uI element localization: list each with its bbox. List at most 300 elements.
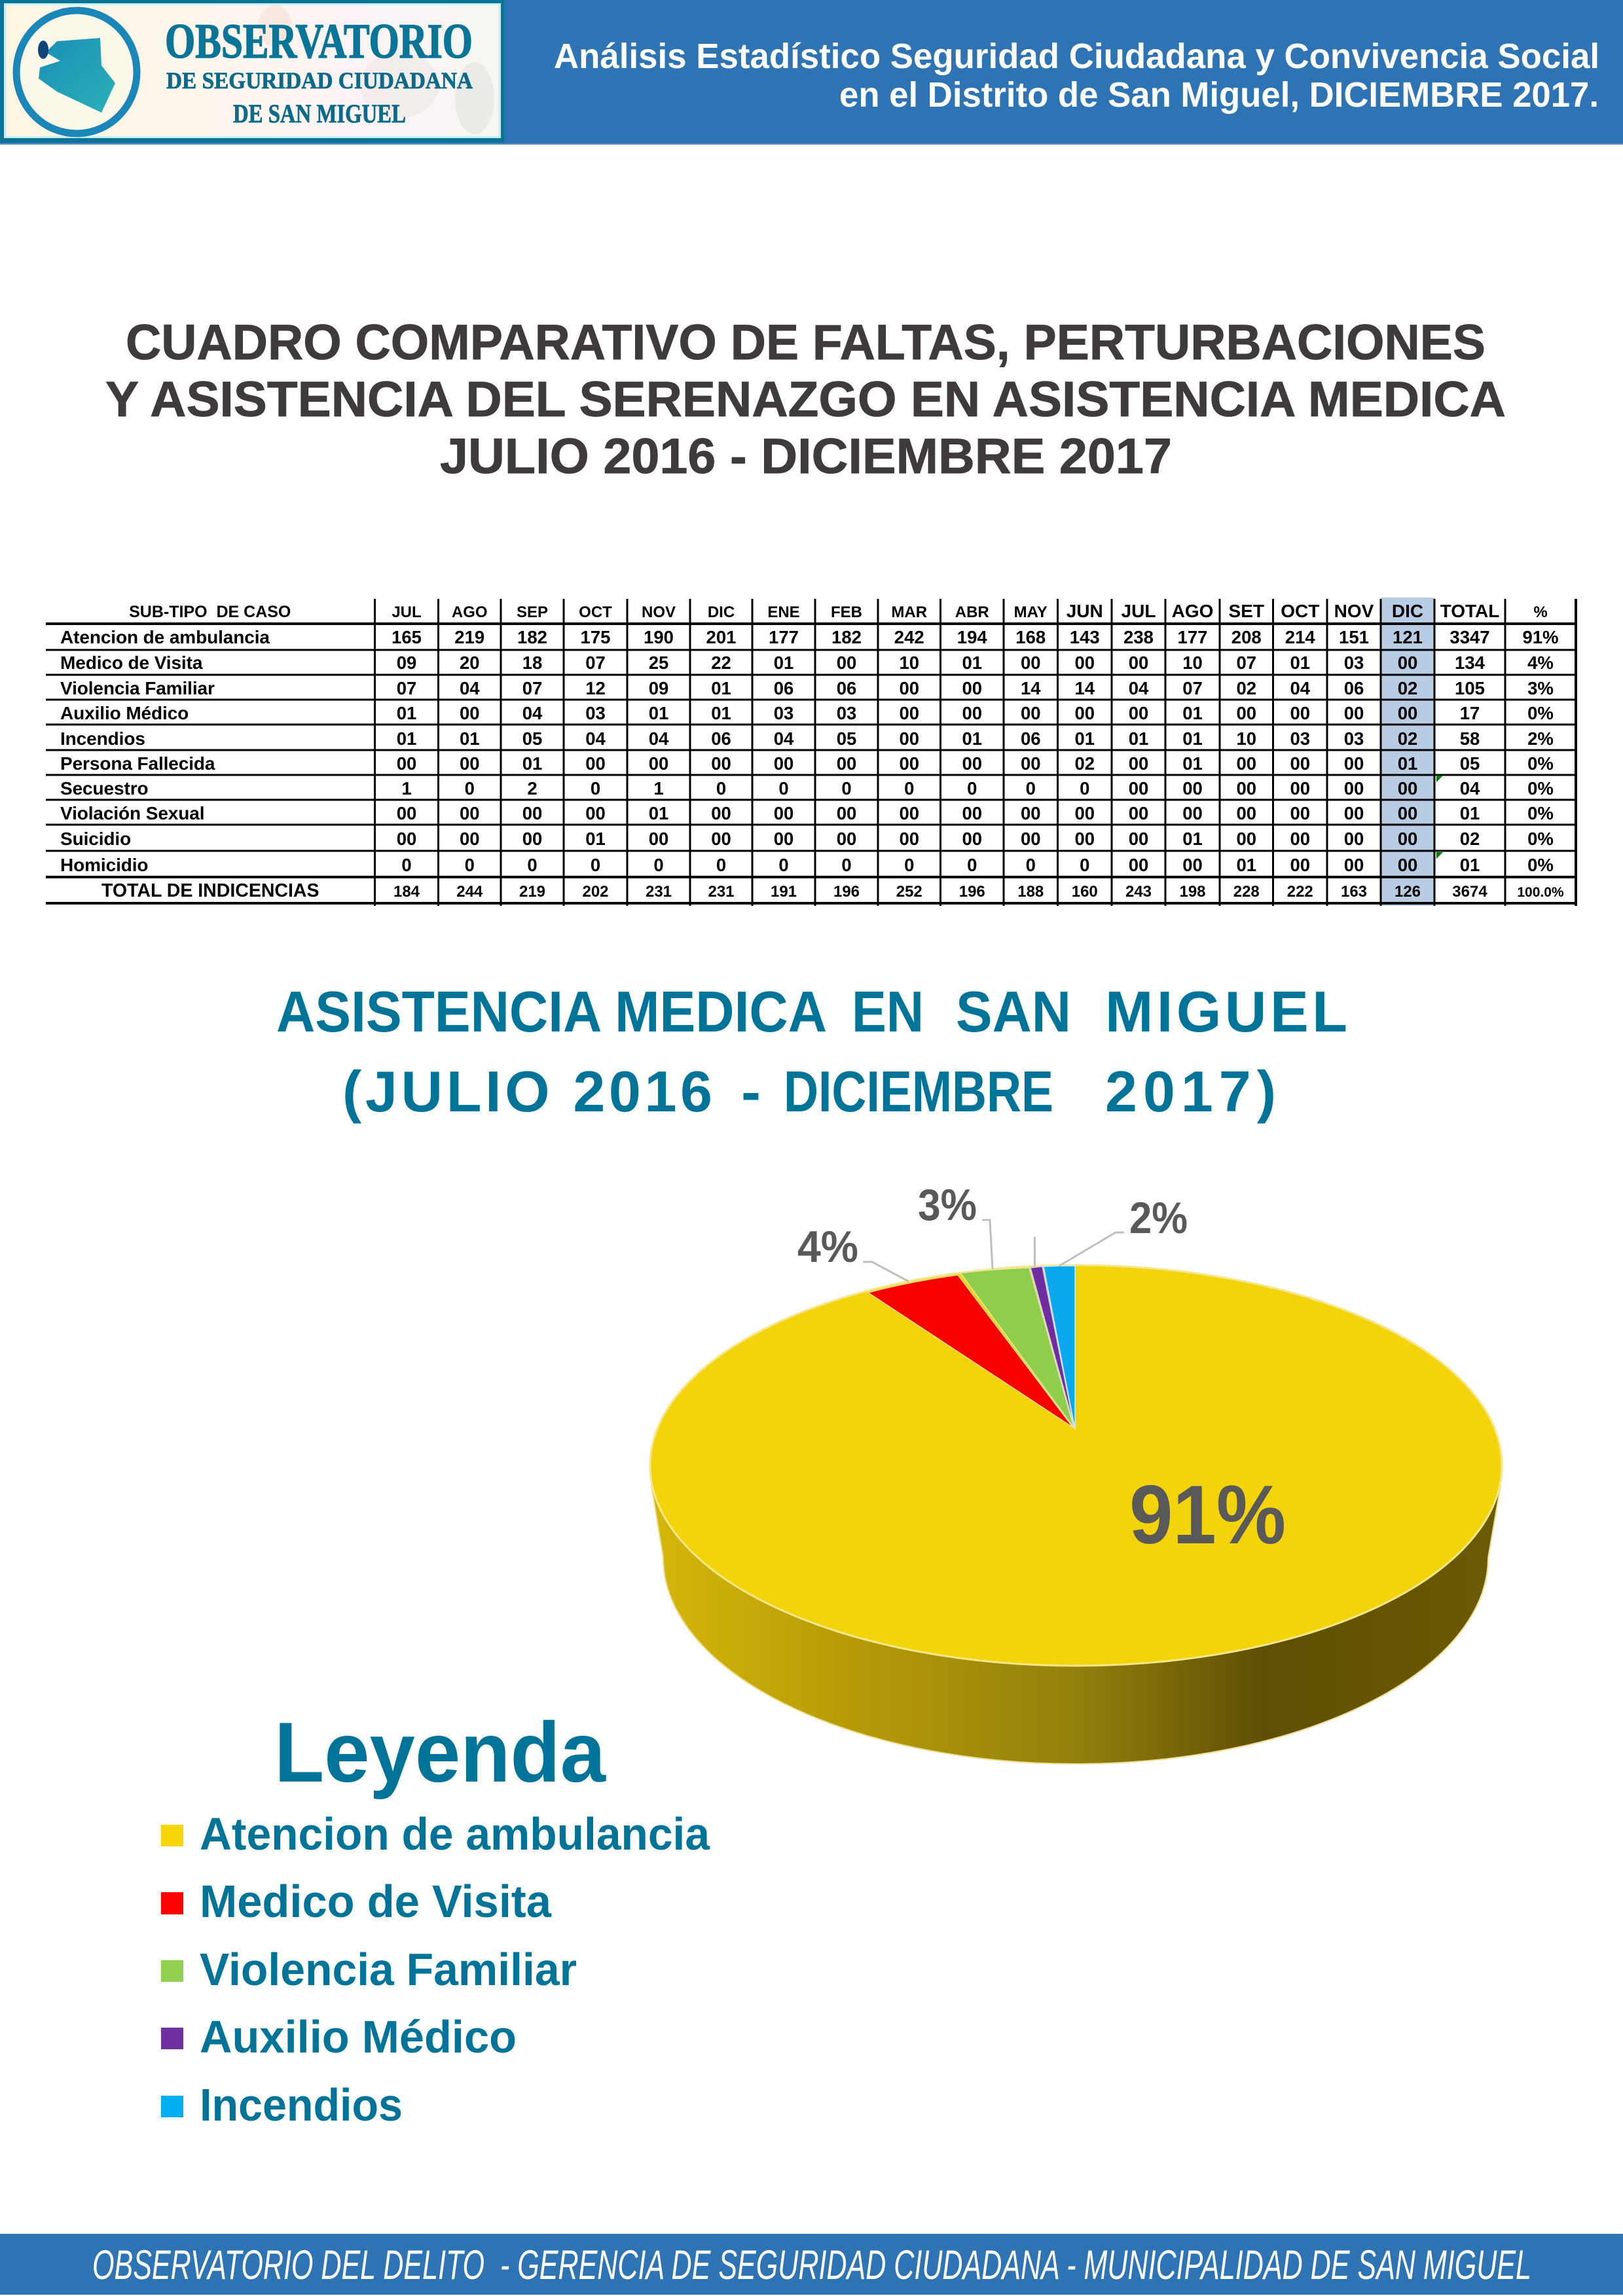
row: total de indicencias	[101, 880, 1564, 901]
row: suicidio: 00	[649, 829, 668, 848]
row: incendios: 00	[899, 728, 919, 749]
row: violencia familiar: 06	[774, 678, 793, 698]
row: violencia familiar: 00	[899, 678, 919, 698]
row: total de indicencias: 160	[1072, 883, 1098, 901]
row: secuestro: Secuestro	[60, 778, 148, 798]
row: homicidio: 0	[465, 855, 475, 874]
header title	[554, 37, 1599, 115]
row: auxilio medico: 03	[774, 703, 793, 723]
row: homicidio: 01	[1460, 855, 1480, 874]
row: incendios: 04	[774, 728, 793, 749]
row: atencion de ambulancia: 182	[517, 627, 547, 647]
row: auxilio medico: 00	[1344, 703, 1364, 723]
chart heading: ASISTENCIA MEDICA	[276, 979, 827, 1044]
row: violacion sexual: 00	[899, 802, 919, 823]
row: medico de visita: 20	[460, 652, 480, 673]
row: total de indicencias: 231	[708, 883, 735, 901]
row: incendios: 05	[837, 728, 856, 749]
row: incendios: 03	[1344, 728, 1364, 749]
row: incendios: 05	[522, 728, 542, 749]
row: violacion sexual: 00	[397, 802, 416, 823]
logo: observatorio: DE SAN MIGUEL	[233, 99, 406, 128]
row: atencion de ambulancia: 190	[644, 627, 674, 647]
row: secuestro: 1	[653, 778, 664, 798]
row: persona fallecida	[60, 753, 1554, 774]
row: medico de visita: 00	[1129, 652, 1148, 673]
row: medico de visita: 22	[711, 652, 731, 673]
row: atencion de ambulancia: 238	[1123, 627, 1154, 647]
row: secuestro: 0	[465, 778, 475, 798]
row: suicidio: 00	[711, 829, 731, 848]
row: homicidio: 0	[527, 855, 538, 874]
row: atencion de ambulancia: 121	[1393, 627, 1423, 647]
row: secuestro: 04	[1460, 778, 1480, 798]
row: total de indicencias: 243	[1125, 883, 1152, 901]
row: incendios: 06	[711, 728, 731, 749]
row: incendios: 01	[962, 728, 982, 749]
row: secuestro: 0	[716, 778, 726, 798]
row: violacion sexual: 00	[1074, 802, 1095, 823]
row: medico de visita: 134	[1455, 652, 1485, 673]
row: persona fallecida: 01	[1398, 753, 1417, 774]
row: atencion de ambulancia: 177	[769, 627, 799, 647]
row: violacion sexual: 00	[1129, 802, 1148, 823]
row: medico de visita: 07	[1236, 652, 1256, 673]
row: persona fallecida: 00	[397, 753, 416, 774]
row: violencia familiar: 01	[711, 678, 731, 698]
row: violacion sexual: 00	[711, 802, 731, 823]
row: persona fallecida: 00	[899, 753, 919, 774]
main title: Y ASISTENCIA DEL SERENAZGO EN ASISTENCIA MEDICA	[105, 372, 1506, 427]
row: secuestro: 2	[527, 778, 538, 798]
row: atencion de ambulancia: 242	[894, 627, 924, 647]
main title: JULIO 2016 - DICIEMBRE 2017	[440, 429, 1172, 484]
row: suicidio: 01	[1182, 829, 1203, 848]
row: violencia familiar: 07	[522, 678, 542, 698]
row: atencion de ambulancia	[60, 627, 1559, 647]
row: medico de visita: 01	[774, 652, 793, 673]
row: incendios: 10	[1236, 728, 1256, 749]
row: persona fallecida: 00	[774, 753, 793, 774]
row: secuestro: 0	[778, 778, 789, 798]
table header row: OCT	[579, 603, 612, 621]
main title	[105, 315, 1506, 484]
chart heading: -	[741, 1059, 761, 1124]
table header row	[129, 601, 1548, 621]
row: atencion de ambulancia: 208	[1231, 627, 1262, 647]
row: total de indicencias: 222	[1287, 883, 1313, 901]
row: persona fallecida: 05	[1460, 753, 1480, 774]
table header row: ABR	[955, 603, 989, 621]
legend item: incendios: Incendios	[200, 2079, 403, 2130]
row: secuestro: 0	[841, 778, 852, 798]
table header row: SET	[1229, 601, 1264, 621]
row: atencion de ambulancia: 151	[1339, 627, 1369, 647]
row: violencia familiar: 06	[1344, 678, 1364, 698]
row: medico de visita	[60, 652, 1554, 673]
row: medico de visita: 00	[1074, 652, 1095, 673]
3D pie chart	[649, 1180, 1503, 1765]
table header row: AGO	[1172, 601, 1213, 621]
row: incendios: 2%	[1527, 728, 1554, 749]
row: violacion sexual: 00	[1290, 802, 1310, 823]
legend item: medico de visita: Medico de Visita	[200, 1876, 552, 1927]
pie side wall	[651, 1486, 1501, 1764]
row: medico de visita: 01	[962, 652, 982, 673]
row: violencia familiar: 09	[649, 678, 668, 698]
row: persona fallecida: 00	[585, 753, 606, 774]
row: homicidio: 00	[1344, 855, 1364, 874]
row: atencion de ambulancia: 214	[1285, 627, 1315, 647]
row: total de indicencias: 228	[1233, 883, 1260, 901]
row: auxilio medico: 01	[649, 703, 668, 723]
header title: Análisis Estadístico Seguridad Ciudadana y Convivencia Social	[554, 37, 1599, 76]
row: suicidio: 00	[1074, 829, 1095, 848]
logo: observatorio: DE SEGURIDAD CIUDADANA	[166, 67, 473, 94]
row: suicidio: 02	[1460, 829, 1480, 848]
logo: observatorio	[0, 0, 504, 143]
row: homicidio: 0	[967, 855, 977, 874]
row: atencion de ambulancia: 175	[581, 627, 610, 647]
legend item: violencia familiar: Violencia Familiar	[200, 1944, 577, 1995]
row: auxilio medico: 01	[711, 703, 731, 723]
header band	[0, 0, 1623, 145]
row: homicidio: 00	[1290, 855, 1310, 874]
row: medico de visita: 03	[1344, 652, 1364, 673]
row: total de indicencias: 100.0%	[1517, 885, 1564, 900]
row: total de indicencias: 198	[1179, 883, 1206, 901]
table header row: NOV	[1334, 601, 1374, 621]
row: total de indicencias: 191	[771, 883, 797, 901]
row: suicidio: 00	[522, 829, 542, 848]
row: auxilio medico: 00	[1074, 703, 1095, 723]
row: violacion sexual: 00	[585, 802, 606, 823]
row: total de indicencias: 196	[833, 883, 860, 901]
row: violencia familiar: 07	[1182, 678, 1203, 698]
row: suicidio: 00	[397, 829, 416, 848]
row: violencia familiar: 12	[585, 678, 606, 698]
row: secuestro: 00	[1129, 778, 1148, 798]
chart heading: 2017)	[1105, 1059, 1276, 1124]
row: violencia familiar: 00	[962, 678, 982, 698]
row: persona fallecida: 0%	[1527, 753, 1554, 774]
row: auxilio medico: 00	[1236, 703, 1256, 723]
percentage labels: 4%	[797, 1222, 858, 1272]
row: homicidio: 0	[591, 855, 600, 874]
row: auxilio medico: 00	[460, 703, 480, 723]
row: homicidio: 00	[1398, 855, 1417, 874]
row: medico de visita: 10	[899, 652, 919, 673]
row: suicidio: 01	[585, 829, 606, 848]
row: atencion de ambulancia: 165	[392, 627, 422, 647]
comparison table	[46, 598, 1577, 906]
row: secuestro: 00	[1236, 778, 1256, 798]
row: auxilio medico: 03	[837, 703, 856, 723]
slice: auxilio medico	[1030, 1266, 1074, 1427]
row: homicidio: 00	[1182, 855, 1203, 874]
row: secuestro: 00	[1290, 778, 1310, 798]
row: total de indicencias: 163	[1341, 883, 1367, 901]
row: secuestro: 0	[967, 778, 977, 798]
row: medico de visita: 18	[522, 652, 542, 673]
percentage labels: 91%	[1129, 1468, 1286, 1561]
row: persona fallecida: 00	[1021, 753, 1041, 774]
row: medico de visita: 25	[649, 652, 668, 673]
row: auxilio medico: 17	[1460, 703, 1480, 723]
row: incendios: 01	[460, 728, 480, 749]
row: auxilio medico: 00	[1021, 703, 1041, 723]
row: persona fallecida: 00	[837, 753, 856, 774]
row: homicidio: 0	[904, 855, 914, 874]
row: violencia familiar	[60, 678, 1554, 698]
row: suicidio: 00	[962, 829, 982, 848]
row: incendios: Incendios	[60, 728, 145, 749]
row: homicidio: Homicidio	[60, 855, 148, 874]
chart heading: EN	[852, 979, 924, 1044]
row: suicidio: 0%	[1527, 829, 1554, 848]
table header row: JUL	[1122, 601, 1156, 621]
row: medico de visita: 00	[837, 652, 856, 673]
row: total de indicencias: 244	[456, 883, 483, 901]
row: atencion de ambulancia: 201	[706, 627, 736, 647]
row: homicidio: 0	[653, 855, 664, 874]
row: medico de visita: 00	[1021, 652, 1041, 673]
row: medico de visita: 09	[397, 652, 416, 673]
table header row: OCT	[1281, 601, 1319, 621]
row: violacion sexual: 00	[1182, 802, 1203, 823]
table header row: NOV	[642, 603, 676, 621]
row: secuestro: 0	[1080, 778, 1089, 798]
row: homicidio: 01	[1236, 855, 1256, 874]
row: atencion de ambulancia: Atencion de ambulancia	[60, 627, 270, 647]
pie top face: atencion de ambulancia	[650, 1265, 1502, 1666]
row: auxilio medico: 04	[522, 703, 542, 723]
row: auxilio medico: 00	[962, 703, 982, 723]
percentage labels	[797, 1180, 1286, 1561]
row: secuestro: 1	[401, 778, 412, 798]
row: medico de visita: 10	[1182, 652, 1203, 673]
row: violencia familiar: 07	[397, 678, 416, 698]
row: atencion de ambulancia: 182	[831, 627, 862, 647]
table header row: MAR	[891, 603, 927, 621]
row: violacion sexual	[60, 802, 1554, 823]
chart heading: DICIEMBRE	[784, 1059, 1053, 1124]
chart heading: SAN	[956, 979, 1071, 1044]
row: incendios: 04	[649, 728, 668, 749]
row: homicidio: 0	[716, 855, 726, 874]
row: persona fallecida: 00	[711, 753, 731, 774]
row: secuestro: 00	[1344, 778, 1364, 798]
slice: medico de visita	[868, 1275, 1073, 1427]
row: total de indicencias: 188	[1017, 883, 1044, 901]
row: secuestro: 0	[1026, 778, 1036, 798]
table header row: JUN	[1067, 601, 1103, 621]
row: secuestro: 0%	[1527, 778, 1554, 798]
row: incendios: 06	[1021, 728, 1041, 749]
row: incendios: 02	[1398, 728, 1417, 749]
row: medico de visita: 07	[585, 652, 606, 673]
row: persona fallecida: 00	[1129, 753, 1148, 774]
slice: violencia familiar	[960, 1268, 1074, 1427]
row: persona fallecida: 00	[1344, 753, 1364, 774]
header title: en el Distrito de San Miguel, DICIEMBRE 2017.	[839, 75, 1599, 115]
row: homicidio: 0	[841, 855, 852, 874]
row: persona fallecida: 00	[460, 753, 480, 774]
row: violacion sexual: 0%	[1527, 802, 1554, 823]
row: persona fallecida: 02	[1074, 753, 1095, 774]
row: auxilio medico: 03	[585, 703, 606, 723]
table header row: MAY	[1014, 603, 1048, 621]
table header row: FEB	[831, 603, 862, 621]
row: suicidio: 00	[1129, 829, 1148, 848]
logo: observatorio: OBSERVATORIO	[165, 14, 473, 69]
legend item: atencion de ambulancia: Atencion de ambulancia	[200, 1808, 710, 1859]
row: medico de visita: 01	[1290, 652, 1310, 673]
row: violacion sexual: Violación Sexual	[60, 802, 204, 823]
row: medico de visita: 00	[1398, 652, 1417, 673]
row: incendios: 01	[397, 728, 416, 749]
table header row: DIC	[708, 603, 735, 621]
row: secuestro: 00	[1398, 778, 1417, 798]
row: persona fallecida: 01	[1182, 753, 1203, 774]
table header row: AGO	[452, 603, 488, 621]
row: secuestro	[60, 778, 1554, 798]
table header row: JUL	[392, 603, 422, 621]
row: incendios	[60, 728, 1554, 749]
legend item: auxilio medico: Auxilio Médico	[200, 2011, 517, 2062]
row: atencion de ambulancia: 177	[1178, 627, 1207, 647]
row: secuestro: 00	[1182, 778, 1203, 798]
row: total de indicencias: 184	[393, 883, 420, 901]
row: total de indicencias: 231	[646, 883, 672, 901]
row: persona fallecida: 00	[1236, 753, 1256, 774]
row: atencion de ambulancia: 194	[957, 627, 987, 647]
row: auxilio medico: 01	[397, 703, 416, 723]
percentage labels: 2%	[1129, 1193, 1188, 1243]
row: auxilio medico: 00	[1398, 703, 1417, 723]
row: violacion sexual: 00	[1021, 802, 1041, 823]
legend	[161, 1708, 710, 2130]
row: violencia familiar: 14	[1074, 678, 1095, 698]
row: persona fallecida: 00	[649, 753, 668, 774]
row: violencia familiar: 04	[460, 678, 480, 698]
row: auxilio medico: Auxilio Médico	[60, 703, 189, 723]
row: violencia familiar: Violencia Familiar	[60, 678, 215, 698]
table header row: TOTAL	[1440, 601, 1499, 621]
row: atencion de ambulancia: 3347	[1450, 627, 1490, 647]
row: auxilio medico: 00	[899, 703, 919, 723]
row: violacion sexual: 00	[460, 802, 480, 823]
table header row: %	[1533, 603, 1548, 621]
row: suicidio: 00	[837, 829, 856, 848]
row: incendios: 04	[585, 728, 606, 749]
row: auxilio medico: 01	[1182, 703, 1203, 723]
leader lines	[863, 1220, 1124, 1282]
chart heading	[276, 979, 1347, 1124]
row: suicidio: Suicidio	[60, 829, 131, 848]
row: homicidio: 0%	[1527, 855, 1554, 874]
row: incendios: 01	[1129, 728, 1148, 749]
row: homicidio: 0	[401, 855, 412, 874]
row: violencia familiar: 3%	[1527, 678, 1554, 698]
row: persona fallecida: 00	[962, 753, 982, 774]
row: violencia familiar: 14	[1021, 678, 1041, 698]
row: suicidio: 00	[899, 829, 919, 848]
row: violencia familiar: 105	[1455, 678, 1485, 698]
row: total de indicencias: 252	[896, 883, 922, 901]
row: auxilio medico: 00	[1290, 703, 1310, 723]
row: violacion sexual: 01	[649, 802, 668, 823]
row: medico de visita: 4%	[1527, 652, 1554, 673]
row: auxilio medico: 0%	[1527, 703, 1554, 723]
row: suicidio: 00	[1236, 829, 1256, 848]
row: persona fallecida: 00	[1290, 753, 1310, 774]
row: homicidio: 00	[1129, 855, 1148, 874]
row: total de indicencias: 126	[1395, 883, 1421, 901]
row: violacion sexual: 00	[962, 802, 982, 823]
row: suicidio: 00	[1398, 829, 1417, 848]
row: suicidio: 00	[460, 829, 480, 848]
row: violacion sexual: 00	[837, 802, 856, 823]
row: incendios: 03	[1290, 728, 1310, 749]
row: violacion sexual: 01	[1460, 802, 1480, 823]
row: homicidio: 0	[1080, 855, 1089, 874]
chart heading: (JULIO 2016	[342, 1059, 712, 1124]
row: homicidio	[60, 855, 1554, 874]
row: total de indicencias: 219	[519, 883, 545, 901]
row: auxilio medico: 00	[1129, 703, 1148, 723]
main title: CUADRO COMPARATIVO DE FALTAS, PERTURBACIONES	[126, 315, 1486, 370]
row: violencia familiar: 02	[1236, 678, 1256, 698]
row: total de indicencias: 3674	[1452, 883, 1487, 901]
row: violencia familiar: 04	[1129, 678, 1148, 698]
row: atencion de ambulancia: 168	[1015, 627, 1046, 647]
row: violacion sexual: 00	[1344, 802, 1364, 823]
row: suicidio: 00	[1344, 829, 1364, 848]
row: incendios: 01	[1074, 728, 1095, 749]
table header row: SEP	[517, 603, 548, 621]
row: secuestro: 0	[591, 778, 600, 798]
row: atencion de ambulancia: 219	[454, 627, 484, 647]
row: suicidio: 00	[1290, 829, 1310, 848]
row: suicidio: 00	[1021, 829, 1041, 848]
row: violacion sexual: 00	[1398, 802, 1417, 823]
row: suicidio: 00	[774, 829, 793, 848]
row: suicidio	[60, 829, 1554, 848]
row: persona fallecida: 01	[522, 753, 542, 774]
chart heading: MIGUEL	[1105, 979, 1347, 1044]
row: violencia familiar: 02	[1398, 678, 1417, 698]
row: homicidio: 0	[778, 855, 789, 874]
row: total de indicencias: 196	[959, 883, 985, 901]
row: total de indicencias: TOTAL DE INDICENCIAS	[101, 880, 319, 901]
slice: incendios	[1044, 1266, 1075, 1429]
row: atencion de ambulancia: 91%	[1522, 627, 1559, 647]
table header row: ENE	[767, 603, 800, 621]
percentage labels: 3%	[918, 1180, 977, 1230]
row: atencion de ambulancia: 143	[1070, 627, 1100, 647]
row: violacion sexual: 00	[522, 802, 542, 823]
table header row: SUB-TIPO DE CASO	[129, 603, 291, 621]
row: violacion sexual: 00	[1236, 802, 1256, 823]
row: medico de visita: Medico de Visita	[60, 652, 202, 673]
row: total de indicencias: 202	[582, 883, 609, 901]
row: incendios: 58	[1460, 728, 1480, 749]
table header row: DIC	[1392, 601, 1423, 621]
row: secuestro: 0	[904, 778, 914, 798]
row: persona fallecida: Persona Fallecida	[60, 753, 215, 774]
row: violencia familiar: 04	[1290, 678, 1310, 698]
